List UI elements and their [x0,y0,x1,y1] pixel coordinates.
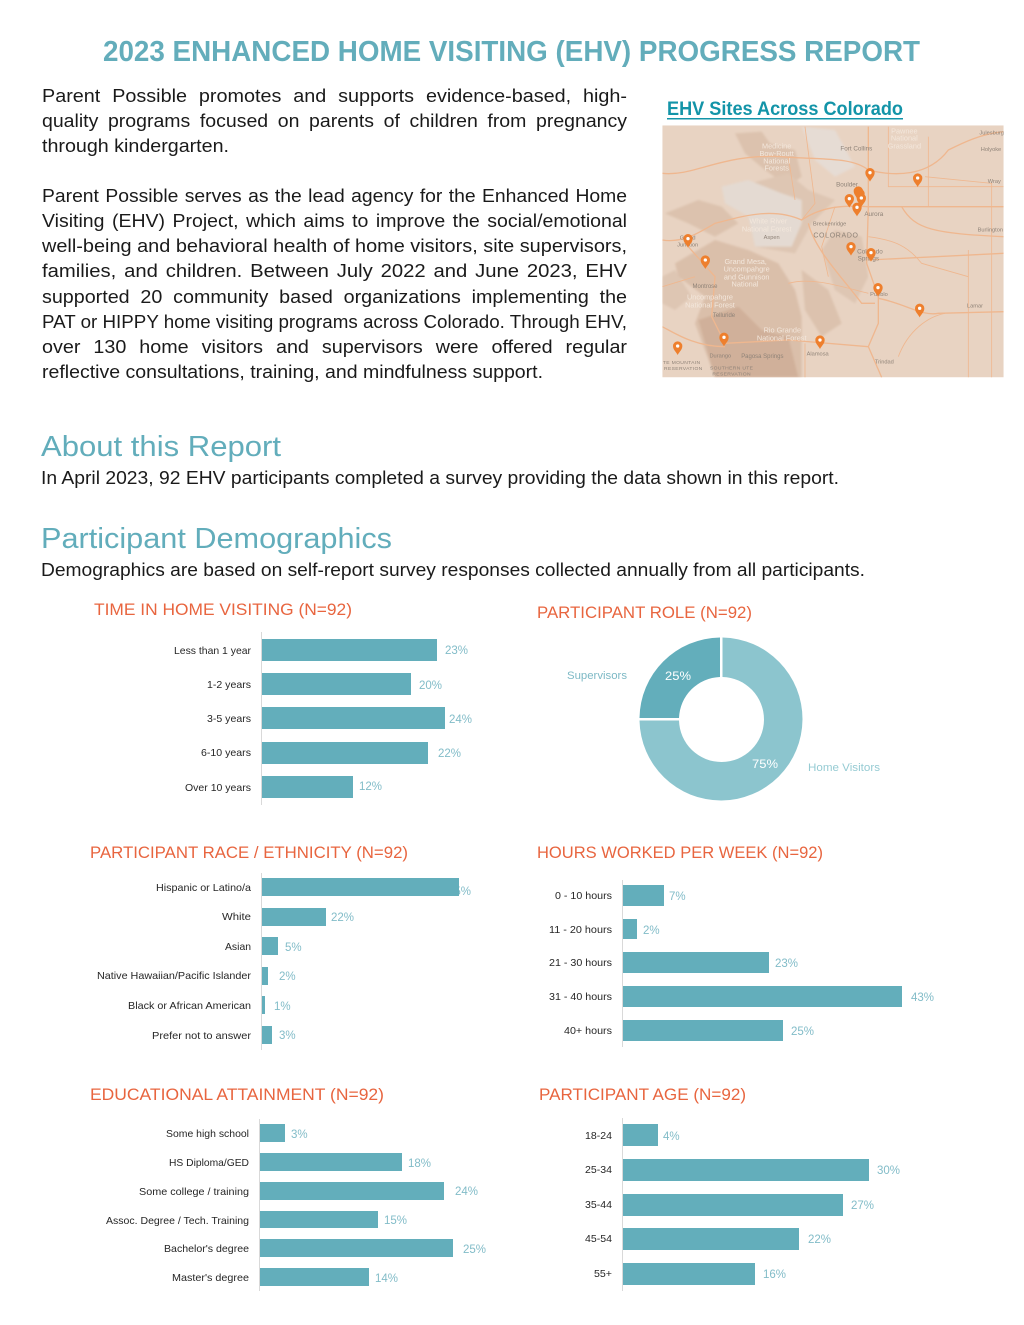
panel: participant race / ethnicity: 5% [285,942,302,954]
panel: participant race / ethnicity: White [222,911,251,923]
text block: introduction: Parent Possible promotes and supports evidence-based, high- [42,85,627,106]
map: EHV sites across Colorado: Breckenridge [813,222,846,228]
panel: time in home visiting: 23% [445,645,468,657]
panel: participant age: 27% [851,1200,874,1212]
text block: about this report: In April 2023, 92 EHV participants completed a survey providing the data shown in this report. [41,467,839,488]
panel: hours worked per week: 7% [669,891,686,903]
map heading: EHV Sites Across Colorado [667,99,903,120]
panel: hours worked per week: 25% [791,1026,814,1038]
heading: about this report: About this Report [41,431,281,463]
panel: participant race / ethnicity: PARTICIPANT RACE / ETHNICITY (N=92) [90,843,408,862]
panel: participant race / ethnicity: Asian [225,941,251,953]
text block: introduction: PAT or HIPPY home visiting programs across Colorado. Through EHV, [42,311,627,332]
panel: time in home visiting: 3-5 years [207,713,251,725]
map: EHV sites across Colorado: Rio Grande [764,326,801,335]
map: EHV sites across Colorado: TE MOUNTAIN [663,360,701,366]
panel: hours worked per week: 23% [775,958,798,970]
panel: educational attainment: 18% [408,1158,431,1170]
panel: time in home visiting: 6-10 years [201,747,251,759]
panel: time in home visiting: Less than 1 year [174,645,251,657]
map: EHV sites across Colorado: Holyoke [981,147,1001,153]
map: EHV sites across Colorado: National [732,280,759,289]
map: EHV sites across Colorado: Telluride [713,313,736,319]
panel: hours worked per week: 31 - 40 hours [549,991,612,1003]
panel: educational attainment: Bachelor's degree [164,1243,249,1255]
map: EHV sites across Colorado: Fort Collins [840,145,872,152]
panel: educational attainment: EDUCATIONAL ATTAINMENT (N=92) [90,1085,384,1104]
panel: participant age: 35-44 [585,1199,612,1211]
donut chart: 25% [665,671,691,683]
panel: participant age: 30% [877,1165,900,1177]
panel: hours worked per week: 40+ hours [564,1025,612,1037]
map: EHV sites across Colorado: Grand Mesa, [724,257,767,266]
panel: participant race / ethnicity [90,843,471,1050]
panel: educational attainment: 15% [384,1215,407,1227]
panel: participant age [539,1085,900,1291]
text block: introduction: through kindergarten. [42,135,229,156]
map: EHV sites across Colorado: Grand [680,235,696,241]
panel: participant role: PARTICIPANT ROLE (N=92) [537,603,752,622]
panel: participant race / ethnicity: Hispanic or Latino/a [156,882,251,894]
text block: introduction [41,85,628,382]
map: EHV sites across Colorado: Aspen [764,235,780,241]
panel: participant age: 16% [763,1269,786,1281]
panel: educational attainment: Some college / training [139,1186,249,1198]
panel: educational attainment: Master's degree [172,1272,249,1284]
heading: participant demographics: Participant Demographics [41,523,392,555]
map: EHV sites across Colorado: Julesburg [979,130,1004,136]
panel: participant race / ethnicity: Native Hawaiian/Pacific Islander [97,970,252,982]
panel: time in home visiting: 1-2 years [207,679,251,691]
text block: introduction: families, and children. Between July 2022 and June 2023, EHV [42,260,628,281]
panel: participant age: PARTICIPANT AGE (N=92) [539,1085,746,1104]
map: EHV sites across Colorado: Montrose [693,284,718,290]
text block: introduction: over 130 home visitors and supervisors were offered regular [42,336,627,357]
panel: participant race / ethnicity: Prefer not to answer [152,1030,252,1042]
map: EHV sites across Colorado: Grassland [888,141,921,150]
panel: educational attainment: 25% [463,1244,486,1256]
panel: hours worked per week: HOURS WORKED PER WEEK (N=92) [537,843,823,862]
map: EHV sites across Colorado: Junction [677,242,698,248]
panel: time in home visiting: 24% [449,714,472,726]
panel: hours worked per week [537,843,934,1047]
panel: participant race / ethnicity: Black or African American [128,1000,251,1012]
map: EHV sites across Colorado: RESERVATION [712,371,751,377]
map: EHV sites across Colorado: National [891,134,918,143]
donut chart: 75% [752,759,778,771]
panel: participant age: 18-24 [585,1130,612,1142]
panel: educational attainment: HS Diploma/GED [169,1157,249,1169]
panel: time in home visiting: 12% [359,781,382,793]
map: EHV sites across Colorado: SOUTHERN UTE [710,365,754,371]
title: 2023 ENHANCED HOME VISITING (EHV) PROGRESS REPORT [103,36,920,68]
panel: participant age: 45-54 [585,1233,612,1245]
map: EHV sites across Colorado: National Forest [685,300,735,309]
panel: participant age: 22% [808,1234,831,1246]
panel: hours worked per week: 21 - 30 hours [549,957,612,969]
text block: introduction: supported 20 community based organizations implementing the [42,286,627,307]
panel: hours worked per week: 2% [643,925,660,937]
text block: introduction: quality programs focused on parents of children from pregnancy [42,110,628,131]
panel: participant race / ethnicity: 65% [448,886,471,898]
panel: time in home visiting: TIME IN HOME VISITING (N=92) [94,600,352,619]
map: EHV sites across Colorado: Medicine [762,142,791,151]
panel: participant age: 4% [663,1131,680,1143]
text block: demographics: Demographics are based on self-report survey responses collected annually from all participants. [41,559,865,580]
panel: participant role: Supervisors [567,670,628,682]
panel: educational attainment: 3% [291,1129,308,1141]
icons: map pins [673,168,924,355]
panel: time in home visiting: 22% [438,748,461,760]
panel: time in home visiting: Over 10 years [185,782,251,794]
map: EHV sites across Colorado [662,125,1004,377]
map: EHV sites across Colorado: Colorado [857,249,883,256]
map: EHV sites across Colorado: COLORADO [813,233,859,240]
panel: participant role [537,603,881,800]
map: EHV sites across Colorado: Wray [988,179,1001,185]
map: EHV sites across Colorado: Springs [858,255,879,262]
panel: educational attainment: Assoc. Degree / Tech. Training [106,1215,249,1227]
panel: hours worked per week: 43% [911,992,934,1004]
text block: introduction: reflective consultations, training, and mindfulness support. [42,361,543,382]
map: EHV sites across Colorado: Uncompahgre [724,265,770,274]
map: EHV sites across Colorado: and Gunnison [724,272,769,281]
panel: educational attainment: 14% [375,1273,398,1285]
map: EHV sites across Colorado: Lamar [967,303,983,309]
map: EHV sites across Colorado: Trindad [875,360,894,366]
panel: participant race / ethnicity: 3% [279,1030,296,1042]
panel: participant race / ethnicity: 2% [279,971,296,983]
panel: educational attainment: 24% [455,1186,478,1198]
map: EHV sites across Colorado: Pueblo [870,292,888,298]
map: EHV sites across Colorado: Aurora [864,211,884,218]
panel: hours worked per week: 11 - 20 hours [549,924,612,936]
map: EHV sites across Colorado: Forests [764,164,789,173]
map: EHV sites across Colorado: Bow-Routt [760,149,794,158]
map: EHV sites across Colorado: Burlington [978,227,1003,233]
donut chart [640,638,802,800]
map: EHV sites across Colorado: National Forest [742,225,792,234]
panel: educational attainment [90,1085,486,1291]
map: EHV sites across Colorado: National Forest [757,333,807,342]
map: EHV sites across Colorado: White River [749,216,788,225]
map: EHV sites across Colorado: Pawnee [891,126,918,135]
panel: participant age: 25-34 [585,1164,612,1176]
map: EHV sites across Colorado: Alamosa [807,351,830,357]
panel: participant race / ethnicity: 1% [274,1001,291,1013]
map: EHV sites across Colorado: Uncompahgre [687,292,733,301]
map: EHV sites across Colorado: National [763,156,790,165]
panel: participant role: Home Visitors [808,762,881,774]
text block: introduction: Parent Possible serves as the lead agency for the Enhanced Home [42,185,627,206]
map: EHV sites across Colorado: Durango [709,353,731,359]
panel: hours worked per week: 0 - 10 hours [555,890,612,902]
map: EHV sites across Colorado: RESERVATION [664,366,703,372]
panel: time in home visiting [94,600,472,805]
map: EHV sites across Colorado: Pagosa Springs [741,354,783,360]
map: EHV sites across Colorado: Boulder [836,181,858,188]
panel: time in home visiting: 20% [419,680,442,692]
text block: introduction: well-being and behavioral health of home visitors, site supervisors, [41,235,627,256]
panel: educational attainment: Some high school [166,1128,249,1140]
text block: introduction: Visiting (EHV) Project, which aims to improve the social/emotional [42,210,627,231]
panel: participant age: 55+ [594,1268,612,1280]
panel: participant race / ethnicity: 22% [331,912,354,924]
